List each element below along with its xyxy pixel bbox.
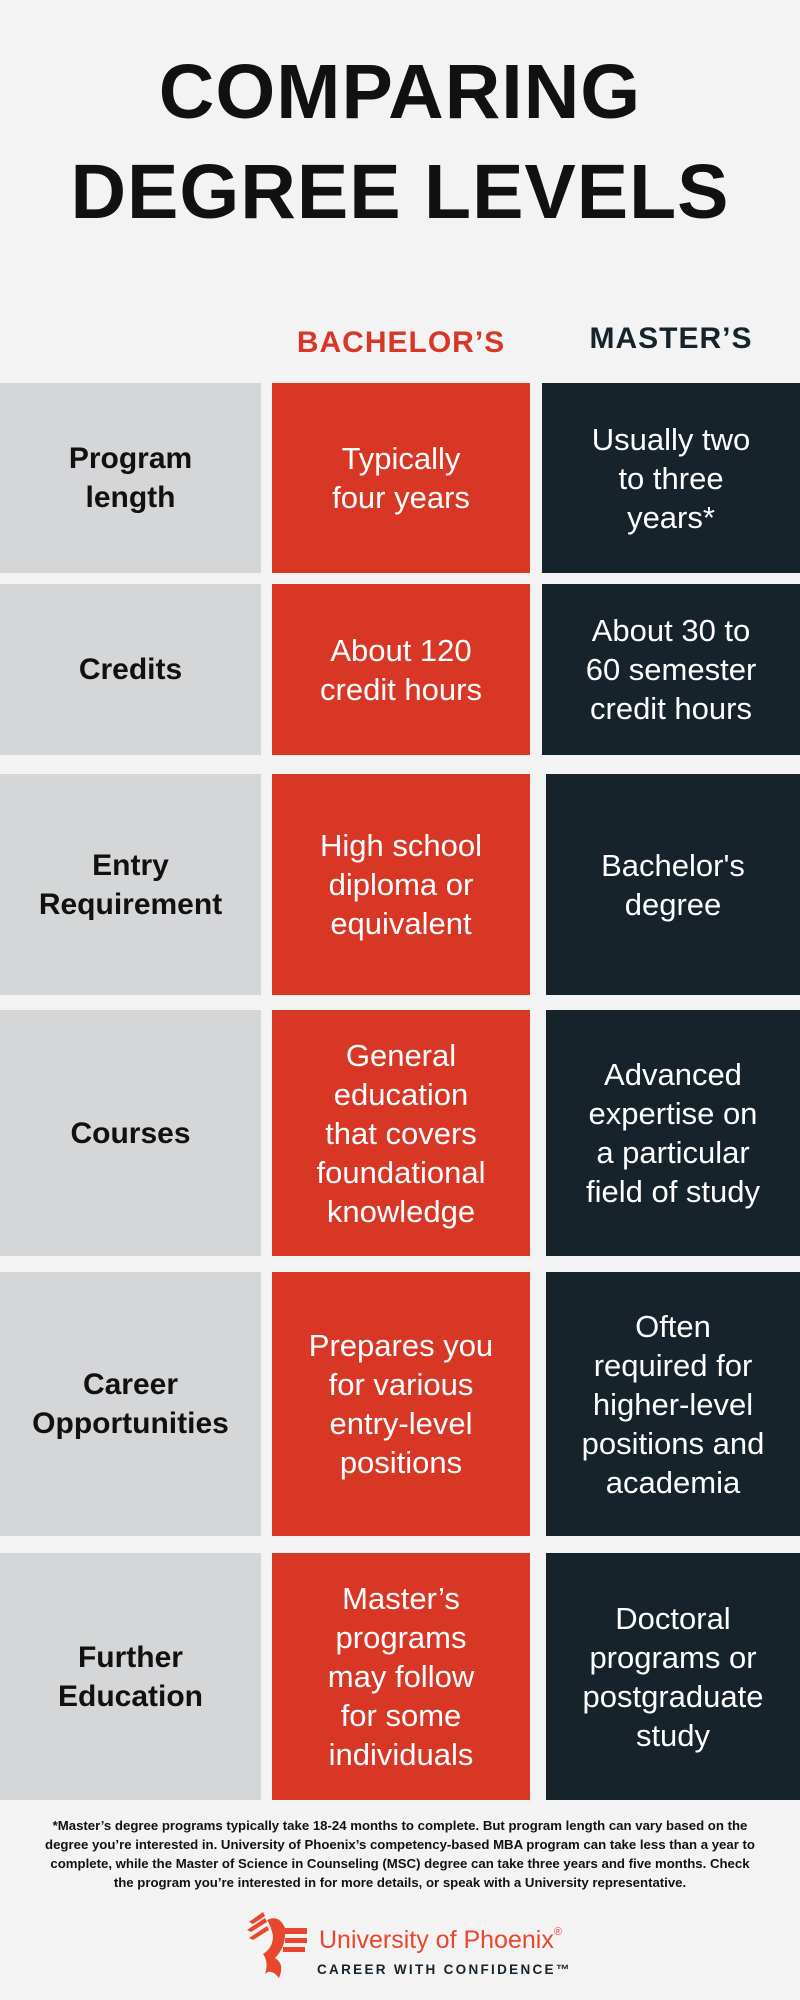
bachelor cell: About 120	[330, 632, 472, 668]
master cell: positions and	[582, 1426, 764, 1460]
master cell	[542, 584, 800, 755]
title: COMPARING	[159, 49, 641, 135]
bachelor cell: may follow	[328, 1659, 474, 1694]
bachelor cell: credit hours	[320, 672, 482, 706]
label: Credits	[79, 653, 182, 686]
label: Education	[58, 1680, 203, 1712]
label: Program	[69, 442, 192, 475]
bachelor cell: entry-level	[329, 1406, 472, 1441]
bachelor cell: individuals	[329, 1737, 473, 1772]
master cell: postgraduate	[582, 1678, 763, 1714]
bachelor cell	[272, 584, 530, 755]
label: Further	[78, 1640, 183, 1674]
bachelor cell	[272, 383, 530, 573]
bachelor cell: Master’s	[342, 1581, 460, 1616]
bachelor cell: knowledge	[327, 1194, 475, 1228]
bachelor cell: four years	[332, 480, 470, 515]
master cell	[546, 774, 800, 995]
row: further education	[0, 1553, 800, 1800]
master cell	[542, 383, 800, 573]
master cell	[546, 1272, 800, 1536]
master cell: expertise on	[589, 1096, 757, 1131]
master cell: field of study	[586, 1174, 760, 1209]
label	[0, 1553, 261, 1800]
title: DEGREE LEVELS	[70, 149, 730, 235]
logo	[247, 1912, 572, 1978]
master cell: study	[636, 1718, 710, 1752]
master cell: academia	[606, 1464, 740, 1500]
master cell: Doctoral	[615, 1600, 731, 1636]
master cell: programs or	[589, 1640, 757, 1674]
master cell: Advanced	[604, 1057, 742, 1092]
master cell: degree	[625, 886, 721, 922]
icon: phoenix	[247, 1912, 307, 1978]
label: length	[86, 481, 176, 514]
bachelor cell: for various	[329, 1367, 473, 1402]
bachelor cell: equivalent	[330, 906, 472, 941]
bachelor cell: for some	[341, 1698, 461, 1733]
bachelor cell: High school	[320, 828, 482, 863]
bachelor cell: education	[334, 1076, 468, 1112]
row: entry requirement	[0, 774, 800, 995]
master cell: 60 semester	[586, 652, 756, 687]
label: Opportunities	[32, 1407, 229, 1440]
label	[0, 774, 261, 995]
bachelor cell	[272, 1010, 530, 1256]
bachelor cell: positions	[340, 1445, 462, 1480]
bachelor cell: Prepares you	[309, 1328, 493, 1363]
bachelor cell	[272, 1553, 530, 1800]
bachelor cell: foundational	[317, 1154, 485, 1190]
master cell: credit hours	[590, 691, 752, 726]
bachelor cell: Typically	[342, 441, 460, 476]
master cell	[546, 1010, 800, 1256]
bachelor cell: programs	[336, 1620, 466, 1655]
bachelor cell: General	[346, 1038, 456, 1072]
label	[0, 1272, 261, 1536]
label: Entry	[92, 848, 169, 882]
title	[70, 49, 730, 235]
bachelor cell: diploma or	[329, 867, 473, 902]
master cell: to three	[618, 460, 724, 496]
row: program length	[0, 383, 800, 573]
bachelor cell	[272, 774, 530, 995]
master cell	[546, 1553, 800, 1800]
brand name: University of Phoenix®	[319, 1926, 562, 1954]
tagline: CAREER WITH CONFIDENCE™	[317, 1962, 572, 1977]
master cell: a particular	[596, 1135, 750, 1170]
row: career opportunities	[0, 1272, 800, 1536]
header: bachelor's: BACHELOR’S	[297, 326, 505, 359]
master cell: Usually two	[592, 422, 750, 456]
master cell: years*	[627, 500, 715, 534]
label	[0, 383, 261, 573]
bachelor cell	[272, 1272, 530, 1536]
bachelor cell: that covers	[325, 1116, 477, 1150]
footnote: *Master’s degree programs typically take 18-24 months to complete. But program length can vary based on the degree you’re interested in. University of Phoenix’s competency-based MBA program can take less than a year to complete, while the Master of Science in Counseling (MSC) degree can take three years and five months. Check the program you’re interested in for more details, or speak with a University representative.	[45, 1818, 755, 1890]
row: credits	[0, 584, 800, 755]
label	[0, 584, 261, 755]
master cell: Often	[635, 1308, 711, 1344]
master cell: higher-level	[593, 1386, 753, 1422]
master cell: Bachelor's	[601, 848, 745, 882]
master cell: required for	[594, 1348, 752, 1382]
label: Requirement	[39, 888, 222, 920]
label	[0, 1010, 261, 1256]
master cell: About 30 to	[592, 613, 750, 648]
label: Career	[83, 1368, 178, 1401]
row: courses	[0, 1010, 800, 1256]
header: master's: MASTER’S	[589, 322, 752, 355]
label: Courses	[70, 1116, 191, 1150]
